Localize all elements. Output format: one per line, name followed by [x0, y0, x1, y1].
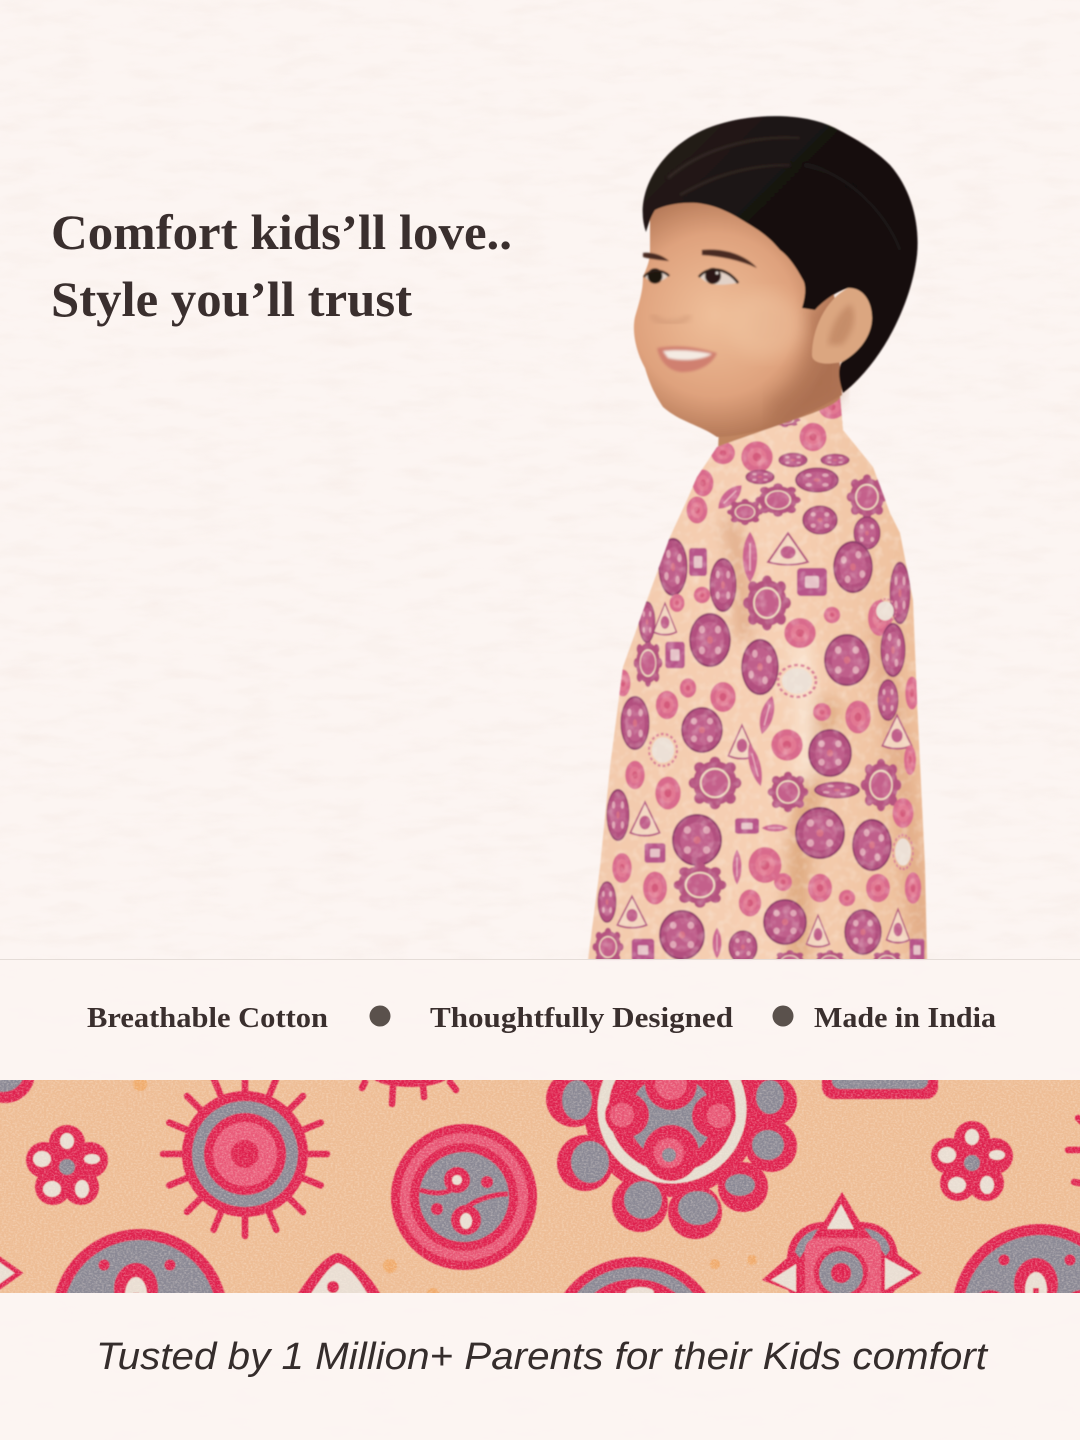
nose shading — [652, 315, 690, 323]
neck and face — [634, 190, 843, 452]
hair shine — [668, 138, 900, 250]
motif: ringed medallion — [391, 1124, 537, 1270]
kurta fabric mottling — [594, 404, 927, 959]
footer tagline: Tusted by 1 Million+ Parents for their Kids comfort — [96, 1336, 989, 1378]
motif: partial top bowl — [821, 1080, 939, 1100]
motif: big scalloped flower — [545, 1080, 798, 1240]
heading: Comfort kids’ll love.. — [51, 204, 512, 260]
feature: breathable cotton: Breathable Cotton — [87, 1002, 328, 1034]
motif: turtle tile — [762, 1192, 922, 1293]
hair — [643, 116, 918, 393]
feature: made in india: Made in India — [814, 1002, 997, 1034]
kurta — [580, 390, 940, 974]
separator dot — [772, 1006, 794, 1026]
heading — [51, 204, 512, 327]
motif: small flower right — [931, 1121, 1013, 1201]
motif: corner top left — [0, 1080, 35, 1104]
separator dot — [370, 1006, 390, 1026]
band motifs — [0, 1080, 1080, 1293]
motif: bottom triangle — [297, 1253, 381, 1295]
motif: sun disc — [163, 1072, 327, 1236]
strip divider — [0, 959, 1080, 960]
motif: partial dome centre — [563, 1256, 707, 1293]
kurta print motifs — [592, 395, 924, 974]
kurta folds and shading — [728, 520, 925, 960]
orange speckles — [133, 1077, 757, 1300]
eyes and eyebrows — [643, 250, 757, 285]
feature: thoughtfully designed: Thoughtfully Designed — [430, 1002, 733, 1034]
band weave texture — [0, 1080, 1080, 1293]
heading: Style you’ll trust — [51, 271, 412, 327]
fabric print band — [0, 1080, 1080, 1293]
motif: small flower left — [26, 1125, 108, 1205]
ear — [812, 288, 872, 364]
smile — [657, 346, 717, 372]
motif: rayed partial top — [358, 1080, 460, 1108]
motif: left edge leaf — [0, 1256, 19, 1290]
feature strip labels — [87, 1002, 997, 1034]
photo: smiling boy in printed kurta — [580, 116, 940, 974]
motif: partial dome right — [953, 1223, 1080, 1293]
motif: right edge rays — [1068, 1118, 1080, 1184]
feature strip background — [0, 960, 1080, 1080]
motif: partial dome left — [54, 1228, 226, 1293]
footer strip background — [0, 1293, 1080, 1440]
